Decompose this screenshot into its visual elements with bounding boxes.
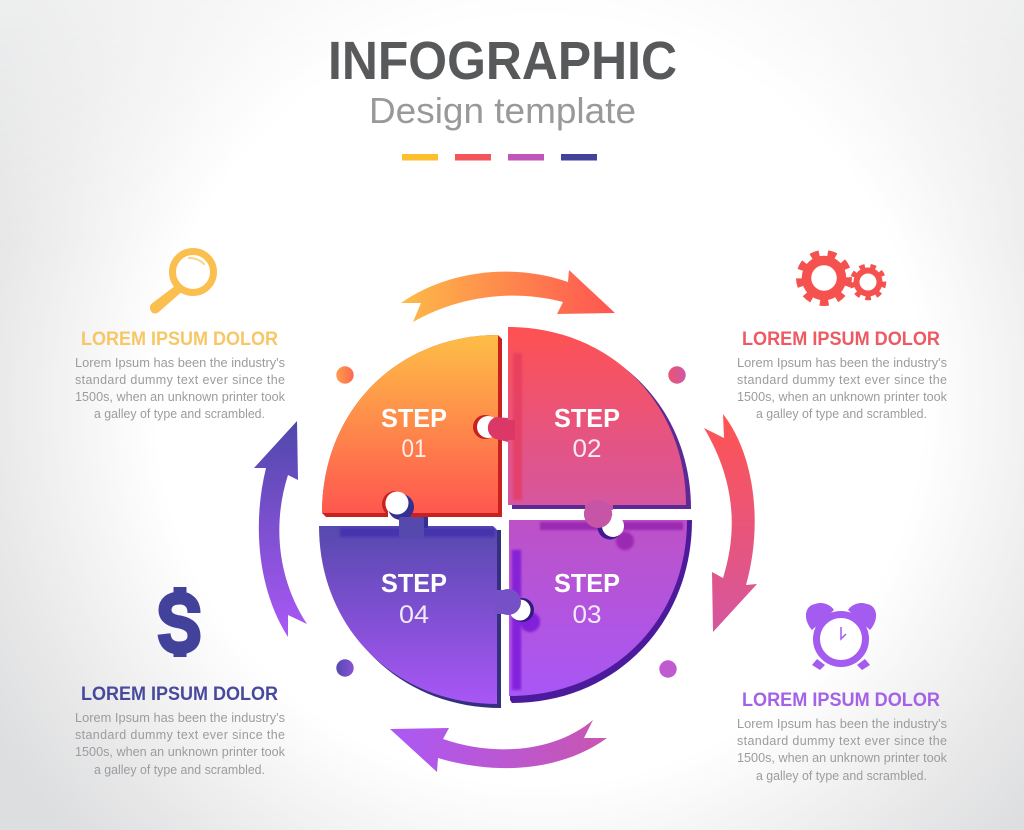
label: step 02: STEP [554, 403, 620, 433]
label: step 01 [381, 403, 447, 463]
heading: step 1: LOREM IPSUM DOLOR [81, 329, 278, 350]
text block: step 4: a galley of type and scrambled. [94, 763, 265, 777]
text block: step 3: Lorem Ipsum has been the industry's [737, 717, 947, 731]
piece: step 2 [488, 327, 691, 528]
label: step 02 [554, 403, 620, 463]
label: step 04: STEP [381, 568, 447, 598]
piece: step 4 [319, 492, 521, 708]
colour key bars [402, 154, 597, 160]
label: step 01: 01 [402, 435, 426, 463]
label: step 03: STEP [554, 568, 620, 598]
text block: step 3: 1500s, when an unknown printer took [737, 751, 948, 765]
icon: gears [799, 253, 884, 303]
text block: step 3 [737, 717, 948, 783]
label: step 04: 04 [399, 601, 429, 629]
text block: step 3: standard dummy text ever since the [737, 734, 947, 748]
dot: step 3 [659, 660, 677, 678]
heading: step 3: LOREM IPSUM DOLOR [742, 690, 940, 711]
text block: step 2: 1500s, when an unknown printer took [737, 390, 948, 404]
icon: alarm clock [806, 603, 876, 670]
dot: step 4 [336, 659, 354, 677]
text block: step 1: Lorem Ipsum has been the industry's [75, 356, 285, 370]
label: step 03 [554, 568, 620, 629]
text block: step 2: standard dummy text ever since the [737, 373, 947, 387]
arrow: left [254, 421, 307, 637]
piece: step 3 [509, 500, 692, 703]
text block: step 4: 1500s, when an unknown printer took [75, 745, 286, 759]
title: INFOGRAPHIC [328, 31, 677, 91]
label: step 04 [381, 568, 447, 629]
heading: step 2: LOREM IPSUM DOLOR [742, 329, 940, 350]
puzzle: four step pieces [319, 327, 692, 708]
arrow: right [704, 414, 757, 632]
text block: step 1: standard dummy text ever since the [75, 373, 285, 387]
text block: step 4: Lorem Ipsum has been the industry's [75, 711, 285, 725]
piece: step 1 [322, 335, 502, 518]
arrow: bottom [390, 720, 607, 772]
icon: magnifying glass [150, 252, 214, 313]
dot: step 1 [336, 366, 354, 384]
text block: step 3: a galley of type and scrambled. [756, 769, 927, 783]
dot: step 2 [668, 366, 686, 384]
label: step 02: 02 [572, 435, 602, 463]
text block: step 4: standard dummy text ever since the [75, 728, 285, 742]
label: step 01: STEP [381, 403, 447, 433]
text block: step 1 [75, 356, 286, 421]
icon: dollar sign [164, 587, 194, 657]
text block: step 2: Lorem Ipsum has been the industry's [737, 356, 947, 370]
arrow: top [401, 270, 615, 322]
heading: step 4: LOREM IPSUM DOLOR [81, 684, 278, 705]
text block: step 4 [75, 711, 286, 777]
label: step 03: 03 [572, 601, 602, 629]
text block: step 1: a galley of type and scrambled. [94, 407, 265, 421]
text block: step 1: 1500s, when an unknown printer took [75, 390, 286, 404]
subtitle: Design template [369, 90, 636, 131]
text block: step 2: a galley of type and scrambled. [756, 407, 927, 421]
text block: step 2 [737, 356, 948, 421]
